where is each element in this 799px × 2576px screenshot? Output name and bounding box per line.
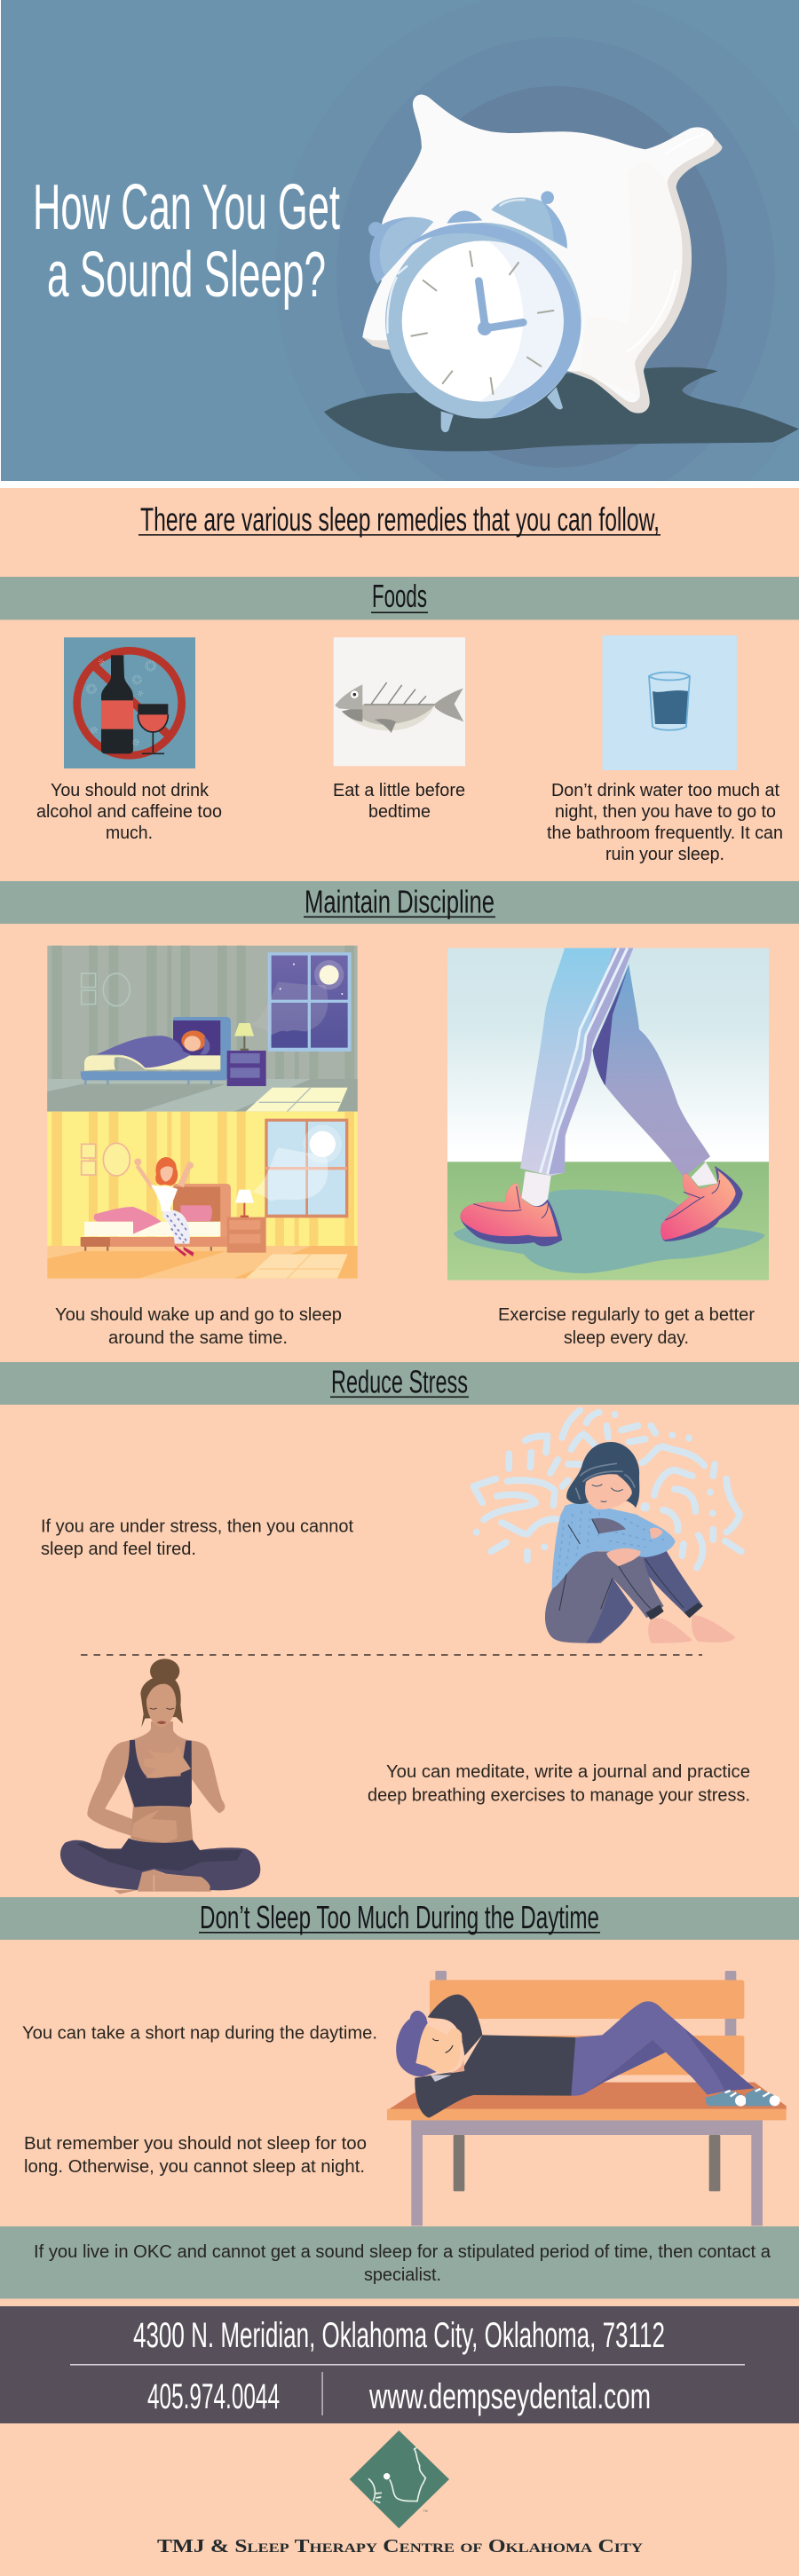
section band: Reduce Stress: Reduce Stress xyxy=(331,1363,468,1400)
section band: Foods xyxy=(0,577,799,619)
logo: diamond with face profile xyxy=(350,2430,449,2528)
divider: dashed line xyxy=(81,1654,702,1656)
front leg xyxy=(460,948,633,1246)
far leg xyxy=(642,1550,703,1618)
text block: much. xyxy=(106,823,153,843)
section band: Maintain Discipline xyxy=(0,881,799,924)
section band: Foods: Foods xyxy=(372,578,427,614)
hair and face xyxy=(566,1442,639,1508)
text block: do not sleep too long xyxy=(24,2134,367,2177)
text block: the bathroom frequently. It can xyxy=(547,823,783,843)
sleeping man xyxy=(396,1995,780,2118)
text block: alcohol and caffeine too xyxy=(36,802,222,822)
text block: meditate xyxy=(368,1762,750,1805)
text block xyxy=(36,781,222,843)
icon: fish skeleton xyxy=(334,637,465,766)
stress squiggles xyxy=(473,1410,741,1568)
bench xyxy=(387,1971,787,2225)
caption: exercise: Exercise regularly to get a better xyxy=(498,1305,755,1325)
back leg xyxy=(593,965,743,1241)
text block: ruin your sleep. xyxy=(605,845,724,864)
text block: You should not drink xyxy=(51,781,210,800)
scene: night bedroom xyxy=(47,946,358,1112)
sweater xyxy=(552,1503,676,1589)
text block: meditate: deep breathing exercises to manage your stress. xyxy=(368,1785,750,1805)
callout band: If you live in OKC and cannot get a sound sleep for a stipulated period of time, then contact a xyxy=(34,2242,771,2262)
text block: nap: You can take a short nap during the daytime. xyxy=(22,2023,377,2043)
text block: do not sleep too long: But remember you should not sleep for too xyxy=(24,2134,367,2154)
text block xyxy=(333,781,465,822)
icon: glass of water xyxy=(602,635,737,770)
food card: limit water xyxy=(547,635,783,864)
website: www.dempseydental.com xyxy=(368,2377,651,2416)
callout band xyxy=(0,2226,799,2298)
hair xyxy=(140,1658,183,1728)
caption: wake and sleep xyxy=(55,1305,342,1348)
icon: clock bells xyxy=(368,191,567,284)
hero title xyxy=(33,172,340,311)
hero title: a Sound Sleep? xyxy=(47,240,326,311)
logo: diamond with face profile: TM xyxy=(423,2509,428,2513)
scene: morning bedroom xyxy=(47,1112,358,1279)
text block: stress: If you are under stress, then you cannot xyxy=(41,1517,353,1537)
illustration: stressed woman xyxy=(473,1410,741,1643)
food card: no alcohol or caffeine xyxy=(36,637,222,843)
text block: do not sleep too long: long. Otherwise, you cannot sleep at night. xyxy=(24,2157,365,2177)
hands xyxy=(144,1745,191,1778)
text block xyxy=(547,781,783,864)
text block: meditate: You can meditate, write a journal and practice xyxy=(386,1762,750,1782)
contact panel xyxy=(0,2306,799,2423)
caption: exercise: sleep every day. xyxy=(564,1328,689,1348)
illustration: walking legs xyxy=(447,948,769,1280)
text block: bedtime xyxy=(368,802,431,822)
illustration: man napping on bench xyxy=(387,1971,787,2225)
section band: Reduce Stress xyxy=(0,1362,799,1405)
section band: Don't Sleep Too Much During the Daytime xyxy=(0,1897,799,1940)
icon: clock face xyxy=(385,223,581,419)
text block: Don’t drink water too much at xyxy=(551,781,779,800)
section band: Maintain Discipline: Maintain Discipline xyxy=(305,884,494,919)
text block: stress xyxy=(41,1517,353,1559)
hero title: How Can You Get xyxy=(33,172,340,243)
illustration: bedroom night and morning xyxy=(47,946,358,1279)
top xyxy=(124,1740,192,1808)
pants xyxy=(545,1550,633,1643)
illustration: meditating woman xyxy=(60,1658,260,1894)
leggings xyxy=(60,1839,260,1890)
food card: eat a little xyxy=(333,637,465,822)
callout band: specialist. xyxy=(364,2265,441,2285)
feet xyxy=(138,1870,210,1892)
caption: wake and sleep: You should wake up and go to sleep xyxy=(55,1305,342,1325)
logo wordmark: TMJ & Sleep Therapy Centre of Oklahoma City xyxy=(157,2535,643,2556)
icon: wine bottle and glass in prohibition sign xyxy=(64,637,195,768)
phone: 405.974.0044 xyxy=(147,2377,280,2416)
text block: stress: sleep and feel tired. xyxy=(41,1540,196,1559)
caption: exercise xyxy=(498,1305,755,1348)
body xyxy=(87,1721,225,1841)
illustration: pillow and alarm clock xyxy=(324,95,799,452)
icon: clock feet xyxy=(441,387,563,432)
text block: Eat a little before xyxy=(333,781,465,800)
text block: night, then you have to go to xyxy=(555,802,776,822)
caption: wake and sleep: around the same time. xyxy=(108,1328,288,1348)
hero panel xyxy=(0,0,799,559)
section band: Don't Sleep Too Much During the Daytime: Don’t Sleep Too Much During the Daytime xyxy=(200,1899,599,1935)
